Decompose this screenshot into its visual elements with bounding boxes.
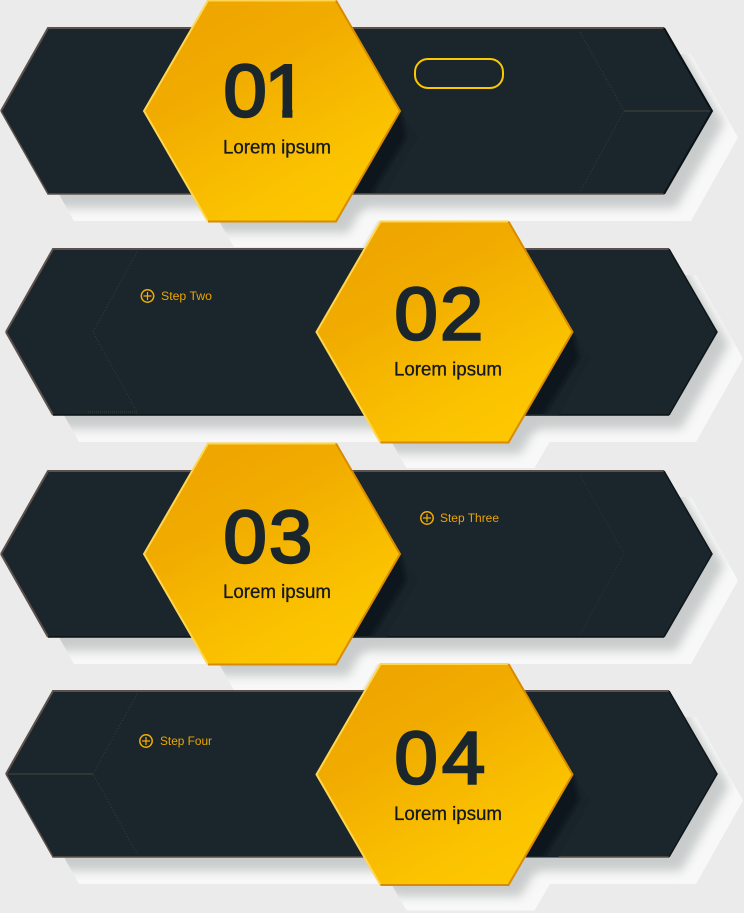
label: Step Three xyxy=(421,512,499,525)
number 04: 04 xyxy=(394,717,485,800)
hexagon cast shadow 3 xyxy=(353,555,407,637)
row 4: step 04 xyxy=(6,664,743,910)
hexagon cast shadow 1 xyxy=(354,113,406,193)
label: Step Four xyxy=(140,735,212,748)
shadow tone 2 xyxy=(64,275,732,458)
hexagon 01 xyxy=(144,0,400,222)
hexagon cast shadow 2 xyxy=(526,333,580,415)
dark banner 3 xyxy=(1,471,712,637)
caption 1: Lorem ipsum xyxy=(223,138,331,158)
shadow base 1 xyxy=(27,27,738,247)
number 01: 01 xyxy=(224,50,308,133)
label: Step Two xyxy=(141,290,212,303)
shadow tone 3 xyxy=(59,497,726,680)
hexagon 03 xyxy=(144,444,400,664)
shadow base 4 xyxy=(32,690,743,910)
dark banner 2 xyxy=(6,249,717,415)
number 02: 02 xyxy=(394,273,483,356)
label: Step Two: Step Two xyxy=(161,291,212,303)
label: Step Four: Step Four xyxy=(160,736,212,748)
shadow base 3 xyxy=(27,470,738,690)
hexagon 02 xyxy=(316,222,572,442)
caption 3: Lorem ipsum xyxy=(223,582,331,603)
shadow tone 4 xyxy=(64,717,732,901)
hexagon cast shadow 4 xyxy=(526,776,580,857)
caption 4: Lorem ipsum xyxy=(394,804,502,825)
hexagon 04 xyxy=(316,664,572,885)
row 2: step 02 xyxy=(6,222,743,468)
row 3: step 03 xyxy=(1,444,738,690)
row 1: step 01 xyxy=(1,0,738,247)
dark banner 4 xyxy=(6,691,717,857)
number 03: 03 xyxy=(224,496,312,579)
label: Step Three: Step Three xyxy=(440,513,499,525)
shadow tone 1 xyxy=(59,54,726,238)
pill outline xyxy=(415,59,503,88)
shadow base 2 xyxy=(32,248,743,468)
caption 2: Lorem ipsum xyxy=(394,360,502,380)
dark banner 1 xyxy=(1,28,712,194)
